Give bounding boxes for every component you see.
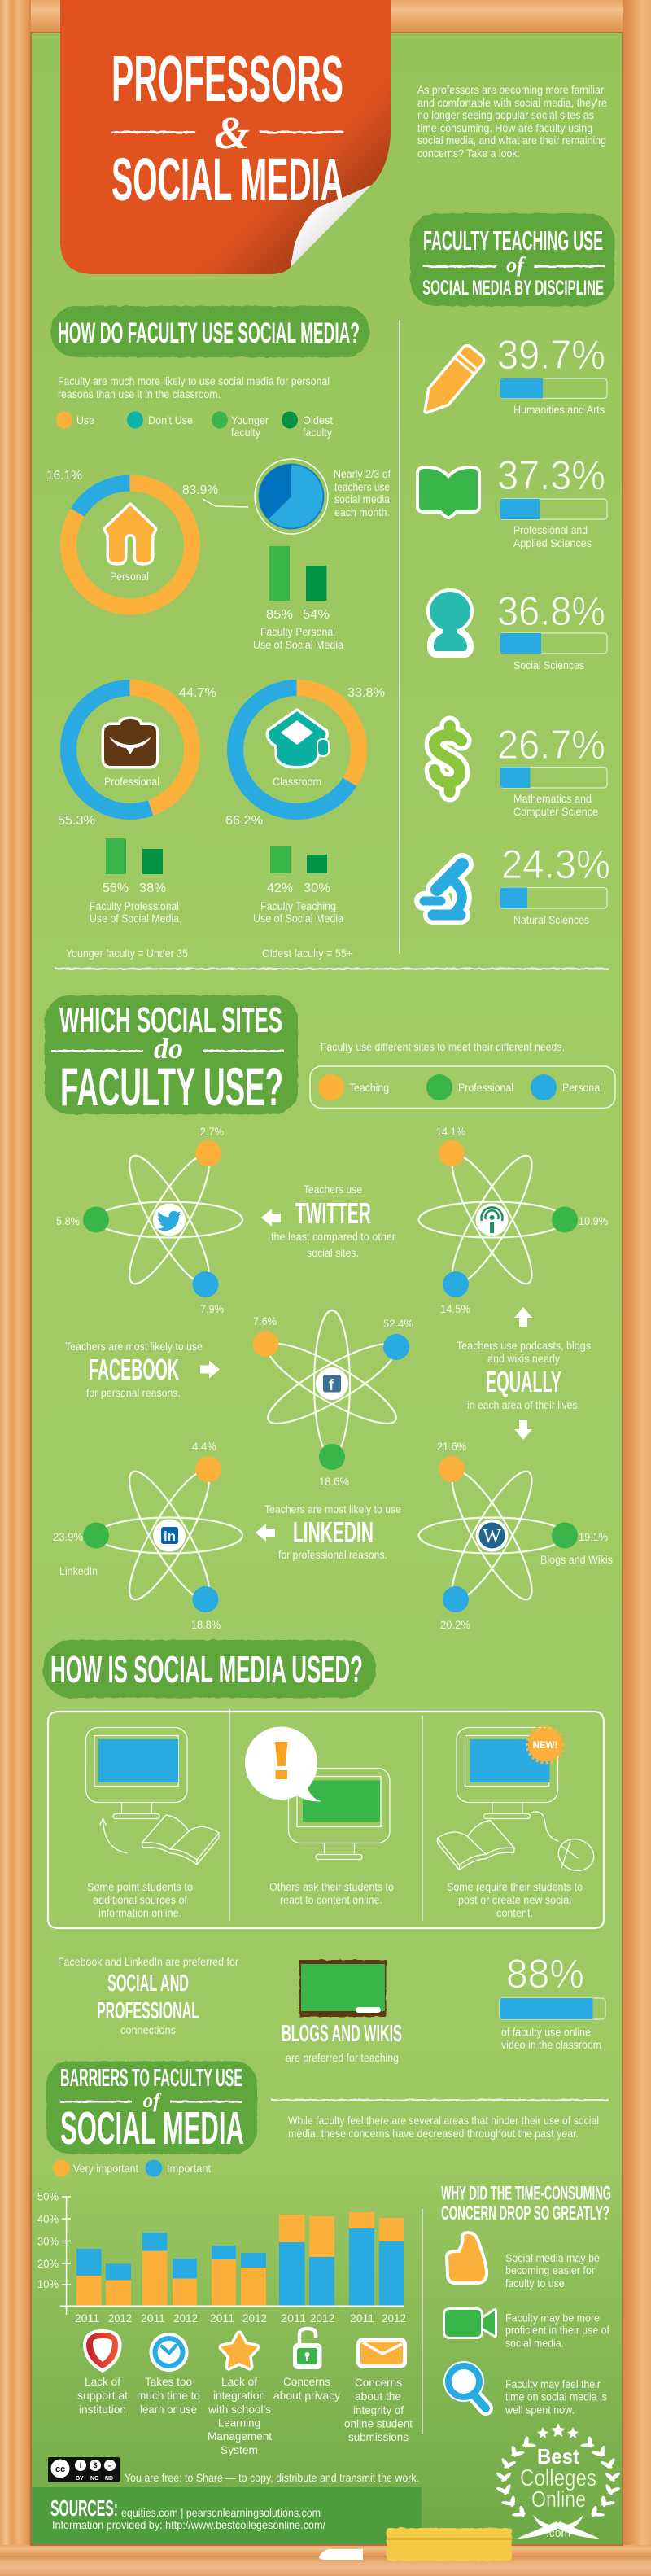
barrier: lack of support: institution [79, 2403, 126, 2416]
donut chart: personal: 83.9% [182, 483, 218, 497]
donut chart: personal: Personal [110, 570, 149, 583]
icon: linkedin [161, 1527, 178, 1544]
heading: how is social media used [42, 1640, 376, 1698]
pie caption: each month. [334, 505, 390, 518]
discipline: professional and applied sciences: Applied Sciences [513, 536, 592, 549]
atom chart: podcasts: 10.9% [579, 1214, 608, 1227]
description text: Faculty are much more likely to use social media for personal [58, 374, 330, 387]
callout: podcasts blogs wikis equally [457, 1339, 591, 1411]
callout: twitter: TWITTER [295, 1196, 371, 1230]
discipline: professional and applied sciences [419, 453, 607, 549]
use 2: react to content: react to content online. [280, 1893, 382, 1906]
legend: site use: Personal [562, 1081, 602, 1094]
heading: which social sites do faculty use: FACULTY USE? [60, 1056, 283, 1117]
heading: barriers to faculty use [46, 2061, 257, 2154]
legend: site use [310, 1066, 615, 1109]
age notes [66, 947, 352, 960]
reason: time well spent [443, 2361, 607, 2416]
icon: graduation cap [269, 711, 328, 766]
legend: site use: Teaching [349, 1081, 389, 1094]
use 2: react to content: Others ask their students to [269, 1880, 394, 1893]
eraser sponge [387, 2528, 512, 2561]
discipline: social sciences [430, 588, 607, 671]
barrier: integrity: submissions [348, 2430, 409, 2443]
atom chart: linkedin [53, 1440, 242, 1631]
icon: person [430, 592, 470, 654]
arrow: right to facebook [200, 1361, 220, 1379]
logo: best colleges online: .com [546, 2526, 570, 2540]
heading: faculty teaching use by discipline: of [506, 253, 526, 277]
arrow: up to podcasts [514, 1307, 532, 1327]
donut chart: personal: 16.1% [46, 469, 82, 483]
icon: pencil [417, 345, 484, 418]
year labels: 2011 [75, 2311, 99, 2325]
stat: 88 percent online video: of faculty use online [501, 2025, 591, 2038]
year labels: 2011 [210, 2311, 234, 2325]
intro text [417, 83, 607, 160]
icon: chalkboard [299, 1960, 386, 2017]
callout: blogs and wikis [282, 2021, 402, 2064]
column divider [399, 320, 400, 954]
barrier: lack of support: Lack of [85, 2375, 120, 2388]
intro text: social media, and what are their remaining [417, 133, 606, 147]
barrier: lack of integration: Lack of [221, 2375, 257, 2388]
title text: PROFESSORS [111, 42, 343, 115]
icon: star [222, 2334, 256, 2367]
bar chart: teaching use [253, 846, 343, 925]
donut chart: classroom [225, 686, 385, 828]
barrier: integrity [344, 2338, 413, 2443]
donut chart: classroom: Classroom [273, 775, 321, 788]
icon: clock [150, 2333, 189, 2372]
stars [537, 2423, 579, 2438]
heading: faculty teaching use by discipline [410, 213, 614, 306]
year labels: 2012 [382, 2311, 406, 2325]
heading: which social sites do faculty use: do [154, 1032, 183, 1065]
bar chart: personal use: Use of Social Media [253, 638, 343, 651]
icon: envelope [356, 2338, 407, 2368]
icon: video camera [445, 2310, 495, 2337]
legend: importance: Very important [73, 2162, 138, 2175]
callout: social and professional: Facebook and LinkedIn are preferred for [58, 1955, 238, 1968]
icon: facebook: f [329, 1377, 334, 1394]
intro text: and comfortable with social media, they're [417, 96, 607, 109]
heading: which social sites do faculty use [45, 995, 298, 1117]
bar chart: professional use: 56% [103, 881, 129, 895]
donut chart: personal [46, 469, 218, 607]
barrier: takes too much time [137, 2333, 200, 2416]
use 3: create new content: content. [496, 1906, 533, 1919]
reason: time well spent: time on social media is [505, 2390, 607, 2403]
donut chart: professional: 55.3% [58, 814, 95, 828]
heading: barriers to faculty use: SOCIAL MEDIA [60, 2102, 244, 2154]
intro text: no longer seeing popular social sites as [417, 108, 594, 121]
atom chart: blogs and wikis: 20.2% [440, 1618, 470, 1631]
icon: microscope [424, 864, 462, 915]
donut chart: professional [58, 686, 216, 828]
year labels: 2011 [141, 2311, 165, 2325]
use 1: additional sources: additional sources of [93, 1893, 187, 1906]
atom chart: facebook [252, 1310, 413, 1488]
sources band: SOURCES: [50, 2495, 118, 2521]
pie chart: nearly 2/3 teachers [255, 459, 328, 534]
callout: blogs and wikis: BLOGS AND WIKIS [282, 2021, 402, 2047]
heading: how do faculty use social media [50, 306, 369, 357]
icon: wordpress: W [483, 1526, 501, 1547]
discipline: mathematics and computer science [435, 722, 607, 818]
heading: why did the concern drop [441, 2183, 611, 2224]
callout: linkedin: LINKEDIN [293, 1515, 374, 1549]
arrow: down to wordpress [514, 1420, 532, 1440]
legend: use groups: faculty [303, 426, 332, 439]
use 3: create new content: Some require their students to [447, 1880, 583, 1893]
barrier: lack of integration: Learning [218, 2416, 260, 2429]
creative commons badge: $ [93, 2461, 98, 2469]
intro text: concerns? Take a look: [417, 147, 520, 160]
discipline: humanities and arts: 39.7% [497, 332, 605, 378]
y axis: 10% [37, 2277, 59, 2290]
legend: use groups: Don't Use [148, 413, 193, 426]
year labels: 2012 [108, 2311, 132, 2325]
barriers divider [271, 2099, 609, 2101]
callout: podcasts blogs wikis equally: Teachers use podcasts, blogs [457, 1339, 591, 1352]
creative commons badge: BY [76, 2476, 84, 2482]
barriers text: media, these concerns have decreased throughout the past year. [288, 2127, 579, 2140]
new badge: NEW! [533, 1741, 557, 1751]
atom chart: twitter: 5.8% [56, 1214, 80, 1227]
sources band: equities.com | pearsonlearningsolutions.com [121, 2506, 321, 2519]
bar chart: professional use [90, 838, 179, 925]
title text: SOCIAL MEDIA [111, 146, 343, 213]
icon: dollar sign [435, 726, 461, 792]
page curl [291, 185, 372, 267]
atom chart: twitter: 7.9% [200, 1302, 224, 1315]
reason: more proficient [445, 2310, 609, 2349]
barrier: privacy [273, 2329, 340, 2402]
year labels: 2011 [281, 2311, 306, 2325]
callout: twitter: the least compared to other [271, 1230, 395, 1243]
logo: best colleges online: Best [537, 2444, 579, 2469]
barrier: takes too much time: Takes too [145, 2375, 192, 2388]
logo: best colleges online: Colleges [520, 2465, 596, 2491]
donut chart: classroom: 66.2% [225, 814, 263, 828]
stacked bars [76, 2212, 404, 2307]
creative commons badge: i [80, 2461, 81, 2469]
discipline: natural sciences: 24.3% [501, 842, 610, 887]
description text: reasons than use it in the classroom. [58, 387, 221, 400]
discipline: mathematics and computer science: Mathematics and [513, 792, 592, 805]
callout: linkedin: Teachers are most likely to use [264, 1502, 401, 1515]
use 3: create new content [438, 1727, 598, 1919]
barrier: integrity: online student [344, 2417, 413, 2430]
year labels [75, 2311, 406, 2325]
bar chart: teaching use: Use of Social Media [253, 912, 343, 925]
barrier: lack of integration: Management [208, 2429, 272, 2443]
bar chart: barriers 2011 vs 2012 [37, 2189, 406, 2325]
callout: facebook: for personal reasons. [86, 1386, 181, 1399]
legend: importance: Important [167, 2162, 211, 2175]
atom chart: facebook: 52.4% [383, 1317, 413, 1330]
bar chart: professional use: 38% [139, 881, 166, 895]
bar chart: personal use: 85% [266, 608, 293, 622]
reason: time well spent: well spent now. [505, 2403, 575, 2416]
barrier: lack of integration: System [221, 2443, 258, 2456]
year labels: 2012 [310, 2311, 334, 2325]
atom chart: facebook: 18.6% [319, 1475, 349, 1488]
sources band [32, 2487, 422, 2544]
icon: facebook [323, 1375, 341, 1394]
reason: time well spent: Faculty may feel their [505, 2377, 601, 2390]
callout: podcasts blogs wikis equally: EQUALLY [486, 1365, 561, 1398]
discipline: humanities and arts [417, 332, 607, 418]
license text: You are free: to Share — to copy, distribute and transmit the work. [125, 2471, 419, 2484]
atom chart: twitter [56, 1125, 242, 1315]
creative commons badge: = [107, 2461, 112, 2469]
y axis: 20% [37, 2257, 59, 2270]
use 1: additional sources: information online. [98, 1906, 181, 1919]
atom chart: podcasts: 14.5% [440, 1302, 470, 1315]
reason: easier to use: becoming easier for [505, 2263, 595, 2276]
discipline: social sciences: 36.8% [497, 588, 605, 634]
discipline: social sciences: Social Sciences [513, 658, 584, 671]
atom chart: blogs and wikis: 19.1% [579, 1530, 608, 1543]
heading: how do faculty use social media: HOW DO FACULTY USE SOCIAL MEDIA? [58, 317, 360, 349]
icon: book [419, 469, 478, 516]
atom chart: blogs and wikis: Blogs and Wikis [540, 1553, 613, 1566]
new badge [527, 1727, 563, 1762]
discipline: natural sciences: Natural Sciences [513, 913, 589, 926]
reason: more proficient: Faculty may be more [505, 2311, 600, 2325]
callout: linkedin [264, 1502, 401, 1561]
atom chart: linkedin: 18.8% [191, 1618, 221, 1631]
barrier: privacy: about privacy [273, 2389, 340, 2402]
callout: facebook: Teachers are most likely to use [65, 1340, 203, 1353]
barriers column divider [422, 2209, 423, 2434]
leader line [203, 499, 248, 507]
reason: easier to use: faculty to use. [505, 2276, 567, 2290]
barrier: lack of integration [208, 2334, 272, 2456]
bar chart: teaching use: Faculty Teaching [260, 899, 336, 912]
stat: 88 percent online video: video in the classroom [501, 2038, 601, 2051]
use 3: create new content: post or create new social [458, 1893, 571, 1906]
callout: blogs and wikis: are preferred for teaching [286, 2051, 399, 2064]
arrow: left to linkedin [256, 1524, 275, 1542]
section divider [55, 968, 609, 970]
barrier: privacy: Concerns [283, 2375, 330, 2388]
atom chart: linkedin: 23.9% [53, 1530, 83, 1543]
icon: podcast [482, 1207, 503, 1233]
icon: house [106, 505, 155, 562]
atom chart: facebook: 7.6% [253, 1314, 277, 1327]
discipline: mathematics and computer science: Computer Science [513, 805, 598, 818]
arrow: left to twitter [261, 1209, 281, 1227]
y axis: 40% [37, 2212, 59, 2225]
y axis [37, 2189, 71, 2315]
sources band: Information provided by: http://www.bestcollegesonline.com/ [52, 2518, 326, 2531]
pie caption: teachers use [334, 480, 390, 493]
legend: site use: Professional [458, 1081, 513, 1094]
donut chart: professional: Professional [104, 775, 159, 788]
icon: bird [157, 1211, 181, 1231]
stat: 88 percent online video: 88% [506, 1951, 584, 1997]
chalk piece [319, 2549, 363, 2560]
callout: social and professional: connections [120, 2023, 176, 2036]
icon: thumbs up [448, 2234, 485, 2281]
legend: use groups: Oldest [303, 413, 333, 426]
bar chart: teaching use: 30% [304, 881, 330, 895]
age notes: Oldest faculty = 55+ [262, 947, 352, 960]
legend: use groups [56, 412, 333, 439]
sites intro text: Faculty use different sites to meet their different needs. [321, 1040, 565, 1053]
barrier: takes too much time: learn or use [140, 2403, 197, 2416]
reason: easier to use [448, 2234, 600, 2290]
legend: importance [53, 2160, 211, 2176]
bar chart: personal use [253, 546, 343, 651]
bar chart: professional use: Faculty Professional [90, 899, 179, 912]
barriers text [288, 2114, 599, 2140]
atom chart: linkedin: 4.4% [192, 1440, 216, 1453]
heading: how is social media used: HOW IS SOCIAL MEDIA USED? [50, 1648, 363, 1690]
icon: magnifying glass [443, 2361, 486, 2408]
barrier: lack of support [77, 2329, 128, 2416]
discipline: natural sciences [424, 842, 610, 926]
discipline: humanities and arts: Humanities and Arts [513, 403, 605, 416]
legend: use groups: faculty [231, 426, 260, 439]
atom chart: podcasts: 14.1% [436, 1125, 465, 1138]
atom chart: blogs and wikis: 21.6% [437, 1440, 466, 1453]
donut chart: classroom: 33.8% [347, 686, 385, 700]
barrier: lack of support: support at [77, 2389, 128, 2402]
barriers text: While faculty feel there are several areas that hinder their use of social [288, 2114, 599, 2127]
barrier: integrity: integrity of [353, 2403, 404, 2416]
atom chart: blogs and wikis [419, 1440, 613, 1631]
panel: uses of social media [48, 1709, 604, 1928]
icon: briefcase [104, 719, 156, 766]
bar chart: professional use: Use of Social Media [90, 912, 179, 925]
barrier: integrity: Concerns [355, 2376, 402, 2389]
barrier: takes too much time: much time to [137, 2389, 200, 2402]
atom chart: linkedin: LinkedIn [59, 1564, 98, 1577]
bar chart: teaching use: 42% [267, 881, 293, 895]
use 1: additional sources [86, 1727, 219, 1919]
callout: linkedin: for professional reasons. [278, 1548, 387, 1561]
legend: use groups: Younger [231, 413, 269, 426]
description text [58, 374, 330, 400]
stat: 88 percent online video [500, 1951, 605, 2051]
legend: use groups: Use [76, 413, 94, 426]
callout: twitter: Teachers use [304, 1183, 362, 1196]
icon: shield [83, 2329, 122, 2373]
pie caption [334, 467, 391, 518]
age notes: Younger faculty = Under 35 [66, 947, 188, 960]
year labels: 2012 [242, 2311, 267, 2325]
heading: barriers to faculty use: of [143, 2090, 162, 2112]
callout: twitter: social sites. [307, 1246, 359, 1259]
creative commons badge: NC [90, 2476, 98, 2482]
donut chart: professional: 44.7% [179, 686, 216, 700]
atom chart: podcasts [419, 1125, 608, 1315]
icon: wordpress [479, 1522, 505, 1548]
bar chart: personal use: Faculty Personal [260, 625, 335, 638]
use 2: react to content [245, 1727, 394, 1906]
callout: social and professional: PROFESSIONAL [97, 1998, 199, 2024]
callout: podcasts blogs wikis equally: and wikis nearly [487, 1352, 560, 1365]
callout: social and professional [58, 1955, 238, 2036]
speech bubble [245, 1727, 321, 1802]
reason: more proficient: proficient in their use of [505, 2323, 609, 2336]
callout: facebook: FACEBOOK [89, 1353, 179, 1386]
intro text: time-consuming. How are faculty using [417, 121, 592, 134]
intro text: As professors are becoming more familiar [417, 83, 604, 96]
y axis: 50% [37, 2189, 59, 2202]
atom chart: twitter: 2.7% [200, 1125, 224, 1138]
icon: padlock [293, 2329, 322, 2369]
icon: linkedin: in [164, 1529, 176, 1544]
discipline: professional and applied sciences: Professional and [513, 523, 588, 536]
laurel wreath [494, 2434, 623, 2539]
logo: best colleges online [494, 2423, 623, 2540]
discipline: mathematics and computer science: 26.7% [497, 722, 605, 768]
creative commons badge: cc [55, 2464, 65, 2474]
barrier: lack of integration: with school's [208, 2403, 271, 2416]
reason: easier to use: Social media may be [505, 2251, 600, 2264]
use 1: additional sources: Some point students to [87, 1880, 193, 1893]
creative commons badge: ND [105, 2476, 113, 2482]
callout: twitter [271, 1183, 395, 1259]
title banner [60, 0, 391, 274]
year labels: 2011 [350, 2311, 374, 2325]
pie caption: Nearly 2/3 of [334, 467, 391, 480]
bar chart: personal use: 54% [303, 608, 330, 622]
callout: facebook [65, 1340, 203, 1399]
discipline: professional and applied sciences: 37.3% [497, 453, 605, 498]
reason: more proficient: social media. [505, 2336, 564, 2349]
barrier: lack of integration: integration [213, 2389, 265, 2402]
callout: social and professional: SOCIAL AND [107, 1970, 189, 1997]
heading: barriers to faculty use: BARRIERS TO FACULTY USE [60, 2063, 242, 2092]
year labels: 2012 [173, 2311, 198, 2325]
y axis: 30% [37, 2235, 59, 2248]
heading: which social sites do faculty use: WHICH SOCIAL SITES [59, 1000, 282, 1040]
logo: best colleges online: Online [531, 2486, 586, 2512]
pie caption: social media [334, 492, 390, 505]
barrier: integrity: about the [355, 2390, 401, 2403]
title text [111, 42, 343, 213]
creative commons badge [48, 2457, 120, 2482]
title text: & [214, 108, 250, 159]
callout: podcasts blogs wikis equally: in each area of their lives. [467, 1398, 580, 1411]
